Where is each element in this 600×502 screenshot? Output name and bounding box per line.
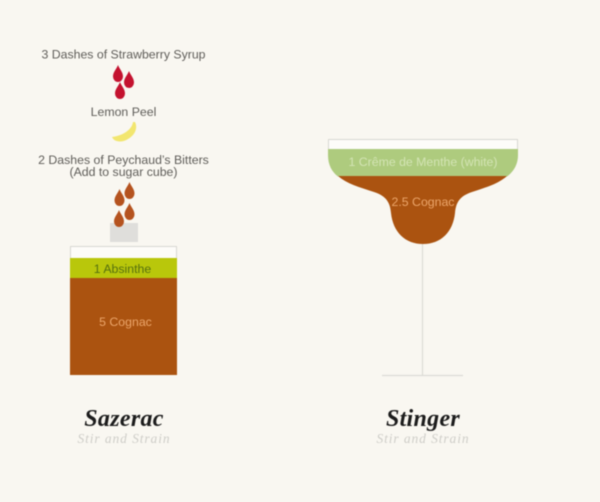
icon: strawberry syrup drops [113, 65, 134, 99]
text: creme de menthe: 1 Crême de Menthe (white) [348, 155, 498, 169]
icon: bitters drops [114, 182, 134, 227]
subtitle: Sazerac method: Stir and Strain [77, 431, 171, 446]
panel: Sazerac [38, 48, 209, 446]
icon: sugar cube [110, 223, 138, 242]
icon: lemon peel [112, 122, 136, 141]
subtitle: Stinger method: Stir and Strain [376, 431, 470, 446]
text: cognac: 5 Cognac [99, 315, 152, 329]
label: lemon peel: Lemon Peel [91, 105, 156, 119]
title: Sazerac: Sazerac [84, 406, 164, 432]
label: strawberry syrup: 3 Dashes of Strawberry Syrup [41, 48, 206, 62]
label: add to sugar cube: (Add to sugar cube) [69, 165, 178, 179]
label: Peychaud's bitters: 2 Dashes of Peychaud’s Bitters [38, 153, 209, 167]
title: Stinger: Stinger [386, 406, 460, 432]
glass: Sazerac [70, 246, 177, 375]
glass rim [328, 140, 518, 150]
layer: absinthe [70, 258, 177, 278]
glass stem and base [382, 244, 463, 376]
text: absinthe: 1 Absinthe [94, 262, 151, 276]
layer: creme de menthe [328, 149, 518, 176]
layer: cognac [338, 176, 507, 244]
panel: Stinger [328, 140, 518, 446]
glass outline [70, 246, 176, 374]
layer: cognac [70, 278, 177, 375]
text: cognac: 2.5 Cognac [392, 195, 454, 209]
